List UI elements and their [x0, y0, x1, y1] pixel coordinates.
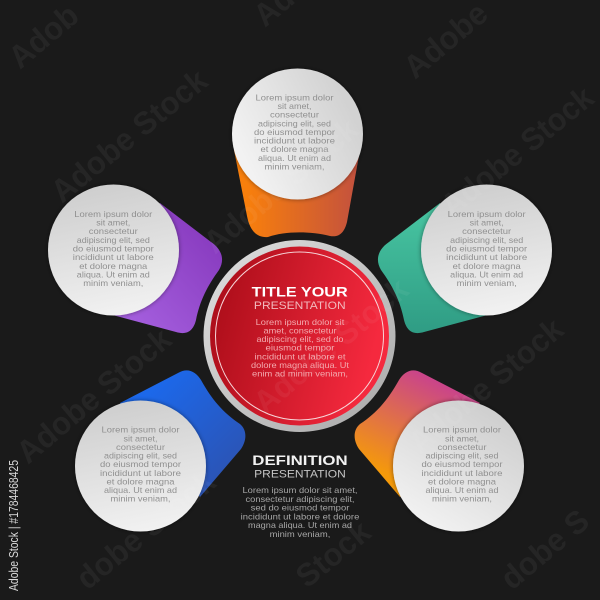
definition text block: Lorem ipsum dolor sit amet, [242, 485, 358, 495]
stock id vertical label: Adobe Stock | #1784468425 [6, 460, 21, 591]
text block: bottom-right circle: do eiusmod tempor [422, 459, 503, 469]
definition block [241, 452, 360, 539]
center text block: eiusmod tempor [266, 343, 335, 353]
text block: bottom-right circle: consectetur [438, 442, 487, 452]
definition heading: DEFINITION [252, 452, 348, 468]
text block: left circle: sit amet, [96, 218, 130, 228]
definition text block: sed do eiusmod tempor [251, 503, 350, 513]
text block: bottom-left circle: consectetur [116, 442, 165, 452]
center text block: dolore magna aliqua. Ut [251, 360, 350, 370]
text block: left circle: Lorem ipsum dolor [74, 209, 152, 219]
petal shape: magenta to orange [355, 370, 480, 497]
text block: bottom-left circle: incididunt ut labore [100, 468, 181, 478]
watermark: Adobe Stock [9, 321, 178, 470]
petal shape: teal [378, 203, 495, 333]
text block: bottom-right circle: et dolore magna [428, 476, 496, 486]
text block: left circle: incididunt ut labore [73, 252, 154, 262]
text block: right circle: minim veniam, [457, 278, 517, 288]
panel: bottom-right magenta-orange petal [355, 370, 524, 532]
watermark: Adobe Stock [246, 271, 415, 420]
text block: right circle: aliqua. Ut enim ad [450, 269, 523, 279]
definition text block: consectetur adipiscing elit, [246, 494, 354, 504]
text block: right circle: Lorem ipsum dolor [448, 209, 526, 219]
text block: left circle: adipiscing elit, sed [77, 235, 150, 245]
watermark: dobe Stock [69, 463, 222, 596]
red disc [210, 246, 389, 426]
text block: bottom-right circle: adipiscing elit, sed [426, 451, 499, 461]
definition text block: magna aliqua. Ut enim ad [248, 520, 352, 530]
text block: top circle: et dolore magna [260, 144, 329, 154]
circle: bottom-left [75, 400, 206, 532]
text block: top circle: incididunt ut labore [254, 136, 335, 146]
thin white ring [216, 252, 384, 420]
text block: bottom-left circle: et dolore magna [106, 476, 175, 486]
text block: left circle [73, 209, 154, 288]
watermark: Stock [289, 513, 377, 594]
definition text block: incididunt ut labore et dolore [241, 511, 360, 521]
circle: left [48, 184, 179, 316]
circle: bottom-right [393, 400, 524, 532]
panel: left purple petal [48, 184, 222, 333]
petal shape: orange [234, 150, 360, 237]
center text block: enim ad minim veniam, [252, 368, 348, 378]
center text block [251, 317, 350, 378]
panel: center red circle [204, 240, 396, 432]
circle: top [232, 68, 363, 200]
text block: left circle: consectetur [89, 226, 138, 236]
text block: bottom-left circle: do eiusmod tempor [100, 459, 181, 469]
definition subtitle: PRESENTATION [254, 469, 346, 481]
text block: bottom-right circle: minim veniam, [432, 494, 492, 504]
text block: bottom-right circle: aliqua. Ut enim ad [426, 485, 499, 495]
petal shape: blue [120, 370, 245, 497]
center text block: amet, consectetur [264, 326, 337, 336]
definition text block [241, 485, 360, 539]
text block: bottom-left circle: sit amet, [124, 433, 158, 443]
text block: bottom-left circle [100, 425, 181, 504]
text block: bottom-right circle: sit amet, [445, 433, 479, 443]
text block: bottom-right circle [422, 425, 503, 504]
text block: left circle: et dolore magna [79, 261, 148, 271]
text block: bottom-left circle: minim veniam, [110, 494, 170, 504]
text block: top circle: Lorem ipsum dolor [256, 92, 334, 102]
text block: bottom-left circle: adipiscing elit, sed [104, 451, 177, 461]
text block: bottom-right circle: Lorem ipsum dolor [423, 425, 501, 435]
watermark: Adobe Stock [401, 311, 570, 460]
text block: top circle: aliqua. Ut enim ad [258, 153, 331, 163]
center subtitle: PRESENTATION [254, 300, 346, 312]
text block: left circle: do eiusmod tempor [73, 244, 154, 254]
text block: top circle [254, 92, 335, 171]
text block: right circle [446, 209, 528, 288]
text block: right circle: adipiscing elit, sed [450, 235, 523, 245]
text block: left circle: minim veniam, [83, 278, 143, 288]
panel: bottom-left blue petal [75, 370, 245, 532]
text block: top circle: do eiusmod tempor [254, 127, 335, 137]
text block: bottom-right circle: incididunt ut labore [422, 468, 503, 478]
center text block: adipiscing elit, sed do [256, 334, 344, 344]
text block: top circle: sit amet, [278, 101, 312, 111]
watermark: Adobe Stock [44, 62, 214, 209]
panel: top orange petal [232, 68, 363, 237]
text block: right circle: incididunt ut labore [446, 252, 528, 262]
text block: top circle: consectetur [270, 110, 319, 120]
silver ring [204, 240, 396, 432]
watermark: Adobe Stock [196, 111, 365, 260]
text block: right circle: do eiusmod tempor [446, 244, 527, 254]
text block: bottom-left circle: aliqua. Ut enim ad [104, 485, 177, 495]
text block: right circle: consectetur [462, 226, 511, 236]
watermark: dobe S [493, 502, 596, 596]
text block: right circle: et dolore magna [453, 261, 521, 271]
text block: top circle: adipiscing elit, sed [258, 118, 331, 128]
text block: top circle: minim veniam, [264, 161, 324, 171]
panel: right teal petal [378, 184, 552, 333]
text block: left circle: aliqua. Ut enim ad [77, 269, 150, 279]
text block: bottom-left circle: Lorem ipsum dolor [102, 425, 180, 435]
center text block: Lorem ipsum dolor sit [256, 317, 345, 327]
definition text block: minim veniam, [270, 529, 330, 539]
circle: right [421, 184, 552, 316]
center text block: incididunt ut labore et [254, 351, 346, 361]
text block: right circle: sit amet, [470, 218, 504, 228]
center title: TITLE YOUR [252, 284, 348, 300]
petal shape: purple [105, 203, 222, 333]
